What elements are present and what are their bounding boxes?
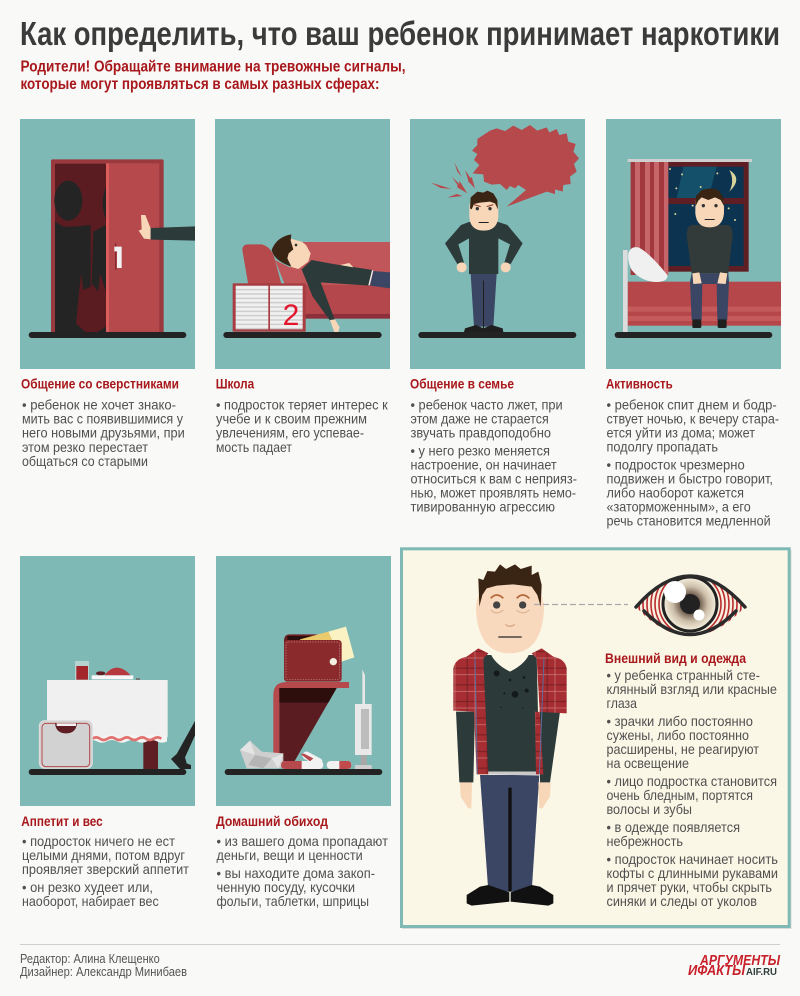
text: appearance list: глаза bbox=[606, 695, 637, 711]
text: activity: ется уйти из дома; может bbox=[606, 424, 756, 440]
icon: night window bbox=[667, 162, 749, 272]
text: activity: • подросток чрезмерно bbox=[606, 456, 745, 472]
text: appetite bbox=[21, 814, 190, 909]
text: school: учебе и к своим прежним bbox=[216, 410, 367, 426]
nose and mouth bbox=[498, 624, 522, 638]
text: household: фольги, таблетки, шприцы bbox=[216, 893, 369, 909]
icon: plate with food bbox=[92, 668, 140, 680]
credits bbox=[20, 952, 187, 979]
floor bbox=[418, 332, 576, 338]
text: appearance list: • подросток начинает носить bbox=[606, 851, 778, 867]
icon: bed bbox=[623, 247, 781, 332]
text: peers: Общение со сверстниками bbox=[21, 377, 179, 392]
dashed connector bbox=[534, 604, 628, 606]
text: family: относиться к вам с неприяз- bbox=[410, 470, 577, 486]
icon: syringe bbox=[355, 669, 372, 769]
text: appearance list: • лицо подростка становится bbox=[606, 773, 777, 789]
text: household: деньги, вещи и ценности bbox=[216, 847, 363, 863]
hair bbox=[478, 564, 542, 607]
text: family: тивированную агрессию bbox=[410, 498, 555, 514]
floor bbox=[223, 332, 382, 338]
text: household: ченную посуду, кусочки bbox=[216, 879, 355, 895]
panel: household illustration bbox=[216, 556, 391, 806]
pants bbox=[480, 775, 539, 892]
text: appearance list: небрежность bbox=[606, 833, 683, 849]
text: appetite: наоборот, набирает вес bbox=[22, 893, 159, 909]
flannel blue stripes bbox=[475, 658, 544, 774]
text: appetite: целыми днями, потом вдруг bbox=[22, 847, 185, 863]
text: activity: ствует ночью, к вечеру стара- bbox=[606, 410, 779, 426]
floor bbox=[29, 769, 186, 775]
text: peers: мить вас с появившимися у bbox=[22, 410, 183, 426]
text: appearance list: кофты с длинными рукавами bbox=[606, 865, 778, 881]
flannel overshirt bbox=[453, 648, 567, 774]
icon: open book bbox=[233, 283, 306, 332]
text: appearance list bbox=[606, 667, 778, 909]
collar bbox=[490, 652, 530, 672]
speech burst bbox=[472, 125, 579, 207]
text: activity: подолгу пропадать bbox=[606, 438, 718, 454]
text: appearance list: • у ребенка странный сте- bbox=[606, 667, 760, 683]
text: family: нью, может проявлять немо- bbox=[410, 484, 576, 500]
sitting teen bbox=[687, 188, 733, 328]
shoes bbox=[467, 885, 553, 906]
icon: open book: 2 bbox=[283, 299, 299, 332]
text: activity: речь становится медленной bbox=[606, 512, 771, 528]
text: school: мость падает bbox=[216, 439, 293, 455]
icon: wallet with money bbox=[284, 627, 354, 682]
text: family: этом даже не старается bbox=[410, 410, 549, 426]
icon: drawer shelf bbox=[273, 682, 349, 763]
icon: red eye bbox=[634, 574, 747, 636]
panel: appearance bbox=[402, 549, 792, 929]
text: activity: • ребенок спит днем и бодр- bbox=[606, 396, 777, 412]
icon: bathroom scale bbox=[39, 721, 92, 768]
text: appetite: Аппетит и вес bbox=[21, 814, 103, 829]
text: appetite: • подросток ничего не ест bbox=[22, 833, 176, 849]
face bbox=[476, 580, 544, 653]
angry teen bbox=[445, 191, 523, 332]
text: peers: • ребенок не хочет знако- bbox=[22, 396, 176, 412]
logo bbox=[688, 953, 780, 979]
icon: pills bbox=[281, 750, 351, 769]
text: family: • у него резко меняется bbox=[410, 442, 550, 458]
text: household: • из вашего дома пропадают bbox=[216, 833, 389, 849]
text: activity: подвижен и быстро говорит, bbox=[606, 470, 773, 486]
icon: crumpled foil bbox=[240, 741, 283, 768]
lightning bolts bbox=[431, 162, 475, 198]
text: appearance list: • зрачки либо постоянно bbox=[606, 713, 753, 729]
icon: table bbox=[47, 680, 168, 769]
subtitle: которые могут проявляться в самых разных сферах: bbox=[20, 76, 380, 93]
panel: school illustration bbox=[215, 119, 390, 369]
text: family: Общение в семье bbox=[410, 377, 514, 392]
text: school bbox=[216, 377, 388, 455]
text: appearance list: клянный взгляд или красные bbox=[606, 681, 777, 697]
subtitle: Родители! Обращайте внимание на тревожные сигналы, bbox=[20, 58, 406, 76]
text: school: • подросток теряет интерес к bbox=[216, 396, 388, 412]
text: activity bbox=[606, 377, 779, 528]
text: family: • ребенок часто лжет, при bbox=[410, 396, 563, 412]
icon: walking leg bbox=[171, 721, 195, 769]
panel: family illustration bbox=[410, 119, 585, 369]
text: household bbox=[216, 814, 389, 909]
text: activity: либо наоборот кажется bbox=[606, 484, 744, 500]
subtitle bbox=[20, 58, 406, 93]
credits: Редактор: Алина Клещенко bbox=[20, 952, 160, 966]
text: family bbox=[410, 377, 577, 514]
floor bbox=[29, 332, 186, 338]
text: appearance list: синяки и следы от уколов bbox=[606, 893, 757, 909]
icon: open door bbox=[106, 163, 159, 333]
eyes bbox=[491, 595, 529, 613]
logo: AIF.RU bbox=[746, 967, 777, 978]
floor bbox=[225, 769, 382, 775]
shirt bbox=[480, 655, 539, 772]
credits: Дизайнер: Александр Минибаев bbox=[20, 965, 187, 979]
icon: curtain bbox=[628, 159, 752, 275]
text: peers: общаться со старыми bbox=[22, 453, 148, 469]
text: appearance list: на освещение bbox=[606, 755, 689, 771]
text: activity: Активность bbox=[606, 377, 673, 392]
text: family: настроение, он начинает bbox=[410, 456, 557, 472]
text: peers: него новыми друзьями, при bbox=[22, 425, 185, 441]
text: activity: «заторможенным», а его bbox=[606, 498, 751, 514]
illustration: teenager bbox=[453, 564, 567, 906]
text: appearance list: сужены, либо постоянно bbox=[606, 727, 749, 743]
text: peers bbox=[21, 377, 185, 469]
text: family: звучать правдоподобно bbox=[410, 424, 551, 440]
heading: appearance: Внешний вид и одежда bbox=[605, 651, 746, 666]
panel: activity illustration bbox=[606, 119, 781, 369]
icon: door frame bbox=[51, 159, 164, 333]
lying teen bbox=[272, 234, 390, 332]
floor bbox=[615, 332, 772, 338]
text: school: Школа bbox=[216, 377, 255, 392]
text: appearance list: • в одежде появляется bbox=[606, 819, 740, 835]
icon: pushing hand bbox=[139, 215, 195, 241]
text: appearance list: и прячет руки, чтобы скрыть bbox=[606, 879, 772, 895]
text: household: Домашний обиход bbox=[216, 814, 328, 829]
text: school: увлечениям, его успевае- bbox=[216, 425, 364, 441]
logo: АРГУМЕНТЫ bbox=[699, 953, 780, 969]
text: appearance list: волосы и зубы bbox=[606, 801, 692, 817]
text: household: • вы находите дома закоп- bbox=[216, 865, 375, 881]
text: appetite: проявляет зверский аппетит bbox=[22, 861, 190, 877]
hands bbox=[460, 782, 551, 808]
icon: glass of drink bbox=[75, 661, 89, 680]
logo: ИФАКТЫ bbox=[688, 963, 745, 979]
text: peers: этом резко перестает bbox=[22, 439, 149, 455]
long sleeves bbox=[456, 712, 560, 782]
icon: sofa bbox=[242, 242, 390, 319]
text: appetite: • он резко худеет или, bbox=[22, 879, 153, 895]
silhouettes of friends bbox=[54, 181, 106, 333]
text: appearance list: очень бледным, портятся bbox=[606, 787, 753, 803]
door interior bbox=[55, 164, 106, 334]
panel: peers illustration bbox=[20, 119, 195, 369]
panel: appetite illustration bbox=[20, 556, 195, 806]
text: appearance list: расширены, не реагируют bbox=[606, 741, 760, 757]
